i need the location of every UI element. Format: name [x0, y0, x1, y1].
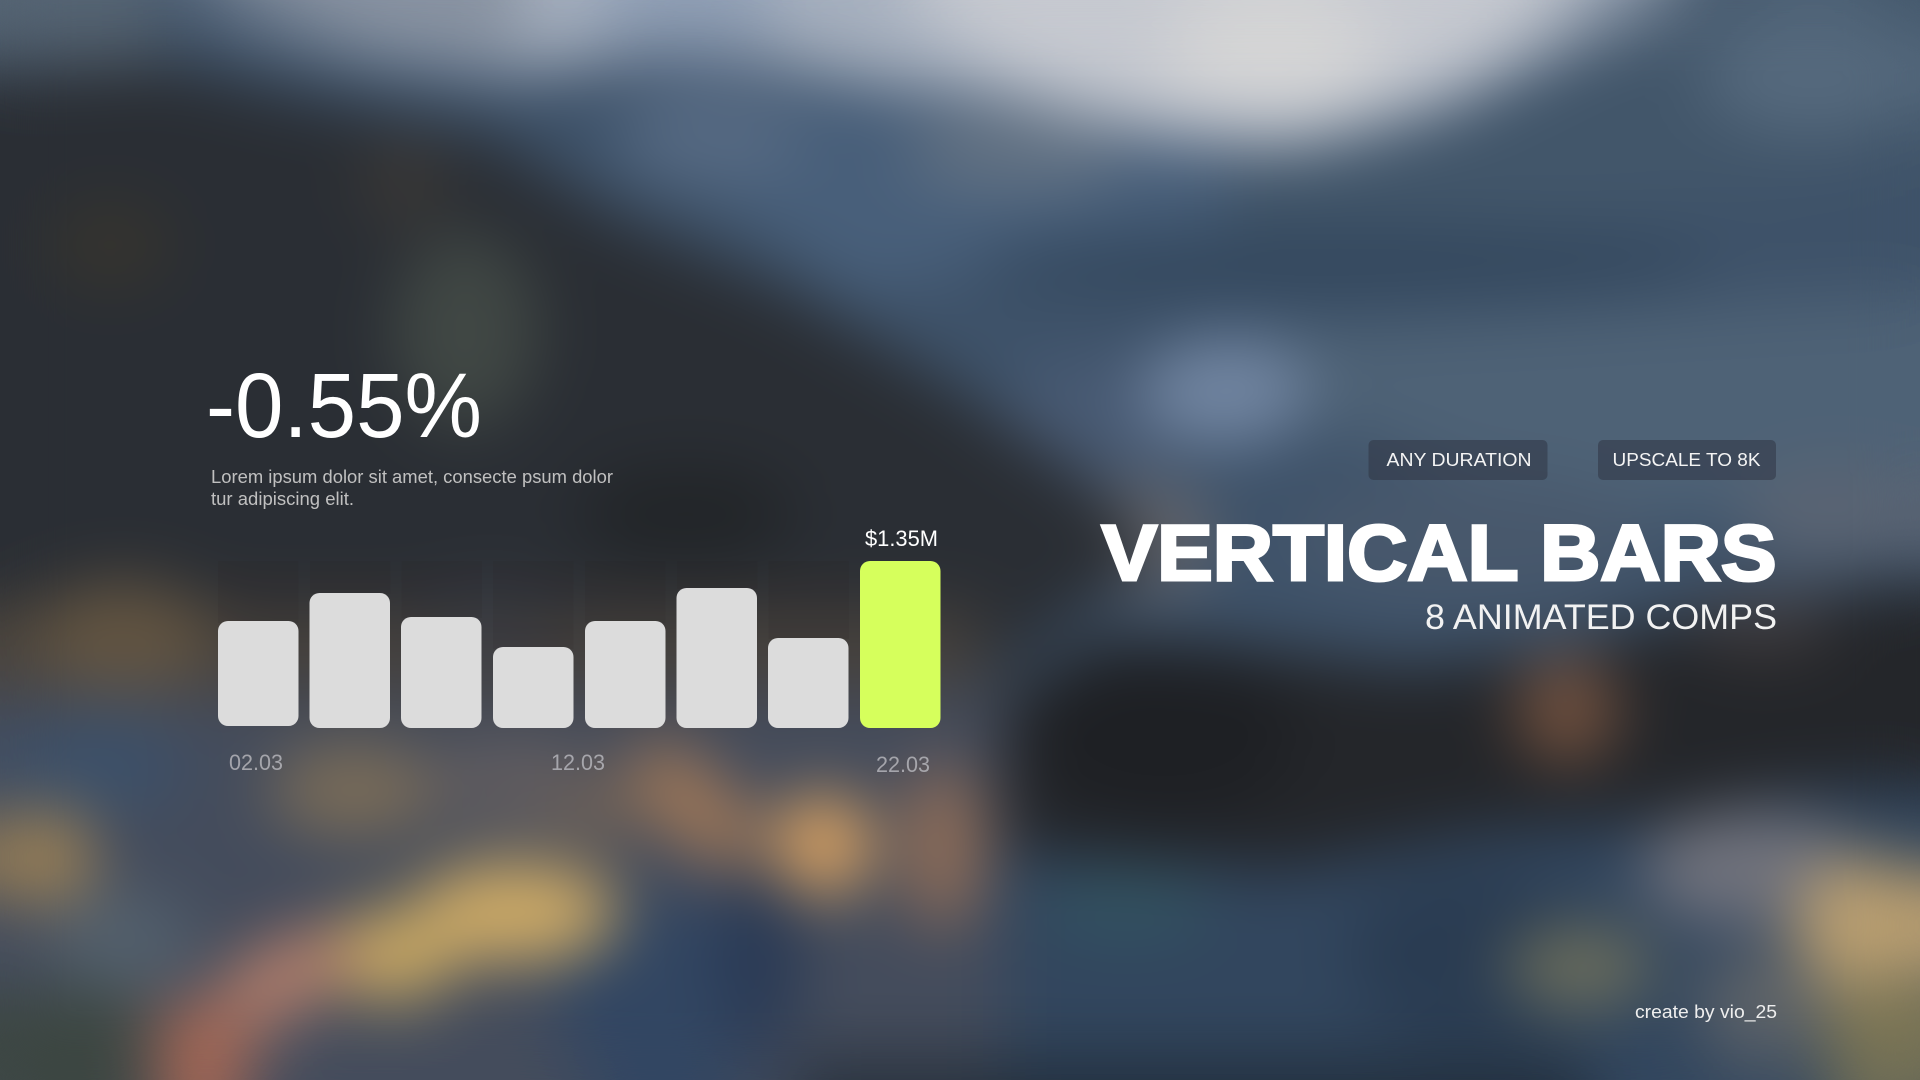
highlighted bar 8: [860, 561, 940, 728]
subtitle: 8 ANIMATED COMPS: [1425, 598, 1777, 637]
bar chart: [218, 561, 940, 728]
bar 3: [401, 617, 482, 728]
bar 5: [585, 621, 666, 728]
date labels: 22.03: [876, 752, 930, 777]
big percentage figure: -0.55%: [206, 355, 482, 457]
tag: any duration: ANY DURATION: [1386, 449, 1532, 470]
bar 7: [768, 638, 848, 728]
bar 6: [676, 588, 757, 728]
date labels: 02.03: [229, 750, 283, 775]
title: VERTICAL BARS: [1102, 508, 1776, 597]
credit: create by vio_25: [1635, 1001, 1777, 1023]
date labels: 12.03: [551, 750, 605, 775]
tag: upscale to 8K: [1598, 440, 1776, 480]
bar 1: [218, 621, 298, 726]
tag: any duration: [1368, 440, 1548, 480]
tag: upscale to 8K: UPSCALE TO 8K: [1612, 449, 1761, 470]
date labels: [229, 750, 930, 777]
description text: tur adipiscing elit.: [211, 489, 354, 509]
bar 4: [493, 647, 574, 728]
description text: [211, 467, 613, 509]
description text: Lorem ipsum dolor sit amet, consecte psum dolor: [211, 467, 613, 487]
value label for highlighted bar: $1.35M: [865, 526, 938, 551]
bar 2: [310, 593, 390, 728]
